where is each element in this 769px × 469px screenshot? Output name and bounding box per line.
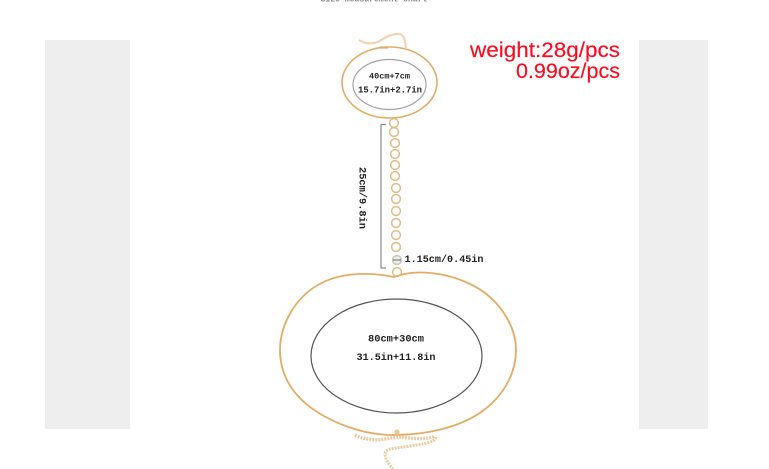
left gray panel xyxy=(45,40,130,429)
weight callout: weight:28g/pcs xyxy=(469,39,620,62)
waist size label xyxy=(356,334,436,364)
link width tick xyxy=(393,259,401,261)
chain length bracket xyxy=(381,124,386,268)
waist clasp and hanging chain xyxy=(355,429,436,469)
right gray panel xyxy=(639,40,708,429)
weight callout: 0.99oz/pcs xyxy=(516,60,620,83)
necklace: small gold ring with clasp chain xyxy=(342,34,437,118)
necklace size label: 15.7in+2.7in xyxy=(358,86,422,96)
weight callout xyxy=(469,39,620,83)
waist size label: 31.5in+11.8in xyxy=(356,352,436,364)
chain links xyxy=(390,119,401,276)
waist size label: 80cm+30cm xyxy=(368,334,424,346)
waist chain: large gold ring xyxy=(280,273,516,435)
necklace size label xyxy=(358,72,422,96)
chain length label: 25cm/9.8in xyxy=(356,167,368,229)
necklace size label: 40cm+7cm xyxy=(369,72,410,82)
waist inner dark outline xyxy=(311,299,482,413)
link width label: 1.15cm/0.45in xyxy=(404,254,484,266)
necklace inner gray outline xyxy=(353,60,426,110)
